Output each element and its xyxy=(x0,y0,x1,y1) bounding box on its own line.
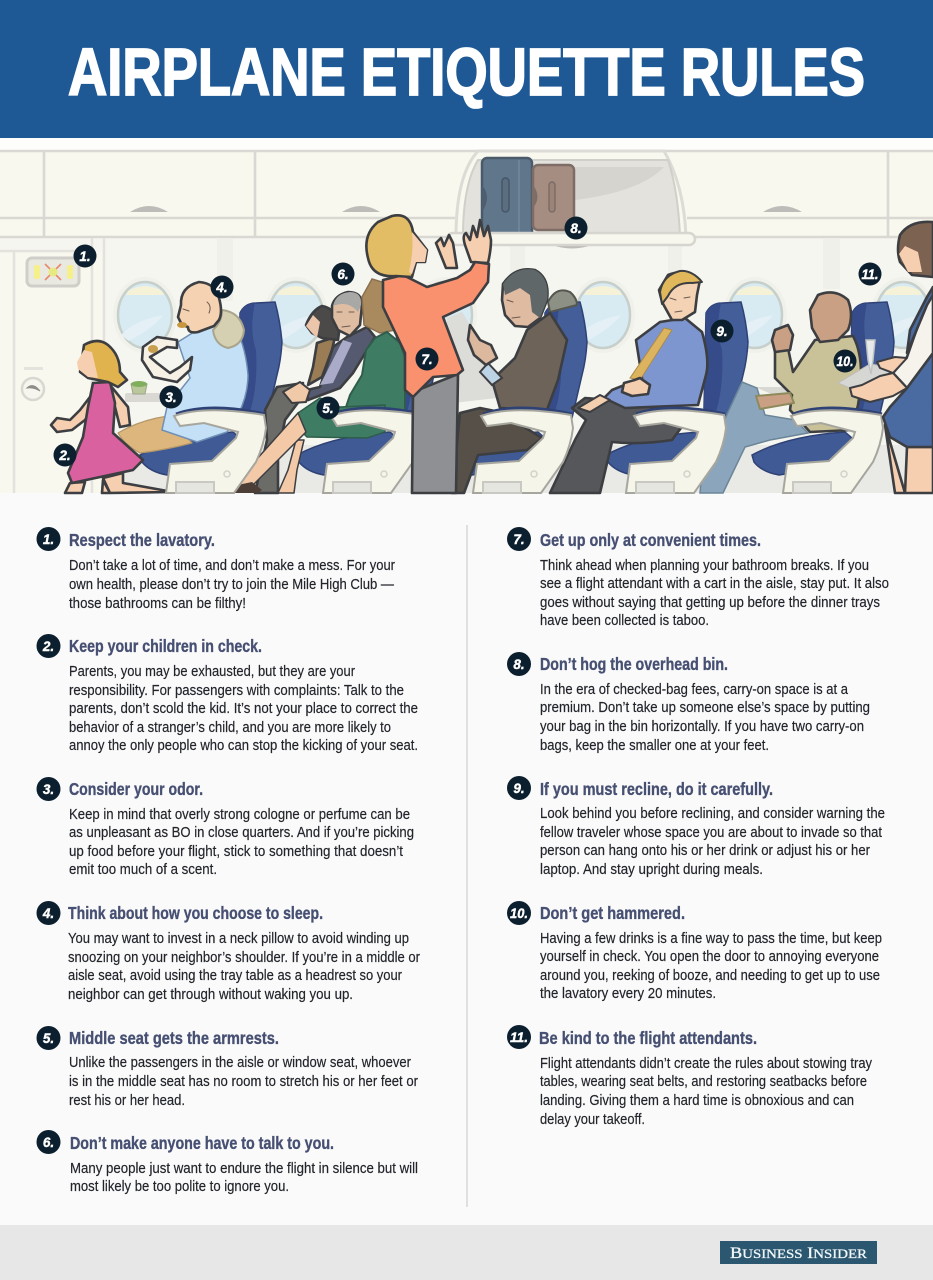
marker 4: 4. xyxy=(215,280,228,295)
body 1: those bathrooms can be filthy! xyxy=(69,596,246,612)
marker 6 xyxy=(332,262,354,286)
body 11: Flight attendants didn’t create the rules about stowing tray xyxy=(540,1056,873,1072)
figure: flight attendant with tray xyxy=(838,222,933,493)
rule 7 xyxy=(507,527,889,629)
body 9: fellow traveler whose space you are about to invade so that xyxy=(540,825,882,841)
body 5: rest his or her head. xyxy=(69,1093,185,1109)
windows xyxy=(113,277,933,353)
seat backs xyxy=(140,302,894,475)
rule 11 xyxy=(507,1025,873,1128)
rule 5: 5. xyxy=(43,1031,54,1046)
marker 7: 7. xyxy=(421,352,433,367)
ceiling light domes xyxy=(130,206,802,212)
body 5: is in the middle seat has no room to stretch his or her feet or xyxy=(69,1074,418,1090)
heading 3: Consider your odor. xyxy=(69,779,203,799)
body 2: annoy the only people who can stop the kicking of your seat. xyxy=(69,738,418,754)
marker 8 xyxy=(564,216,588,240)
body 2: responsibility. For passengers with complaints: Talk to the xyxy=(69,683,404,699)
body 2 xyxy=(69,664,418,754)
heading 6: Don’t make anyone have to talk to you. xyxy=(70,1133,334,1153)
icon: champagne glass xyxy=(866,340,875,374)
marker 4 xyxy=(210,276,234,298)
body 7: goes without saying that getting up before the dinner trays xyxy=(540,595,880,611)
body 6: most likely be too polite to ignore you. xyxy=(70,1179,289,1195)
title banner xyxy=(0,0,933,138)
rule 4: 4. xyxy=(42,906,54,921)
marker 11 xyxy=(858,262,882,286)
marker 10: 10. xyxy=(836,354,854,369)
marker 3 xyxy=(160,386,182,408)
body 4: snoozing on your neighbor’s shoulder. If you’re in a middle or xyxy=(68,950,420,966)
open overhead bin xyxy=(447,151,695,248)
marker 10 xyxy=(834,350,856,372)
figure: girl running in the aisle xyxy=(51,341,173,493)
figure: passenger with neck pillow eating xyxy=(118,282,248,453)
footer bar xyxy=(0,1225,933,1280)
marker 11: 11. xyxy=(862,267,878,282)
marker 8: 8. xyxy=(570,221,582,236)
suitcase: large xyxy=(482,158,532,237)
rule 5 xyxy=(36,1026,418,1109)
body 2: parents, don’t scold the kid. It’s not your place to correct the xyxy=(69,701,418,717)
heading 8: Don’t hog the overhead bin. xyxy=(540,654,728,674)
rule 1: 1. xyxy=(43,532,54,547)
body 9: laptop. And stay upright during meals. xyxy=(540,862,763,878)
figure: passenger in blue shirt reclining xyxy=(550,271,707,493)
body 1: Don’t take a lot of time, and don’t make a mess. For your xyxy=(69,558,395,574)
body 1 xyxy=(69,558,395,612)
body 10: yourself in check. You open the door to annoying everyone xyxy=(540,949,879,965)
rule 4 xyxy=(36,901,420,1003)
figures: family in the middle row xyxy=(228,279,405,493)
marker 1: 1. xyxy=(79,249,91,264)
body 8: In the era of checked-bag fees, carry-on space is at a xyxy=(540,682,849,698)
body 5: Unlike the passengers in the aisle or window seat, whoever xyxy=(69,1055,411,1071)
figure: suit passenger using phone xyxy=(452,269,577,493)
logo: Business Insider xyxy=(720,1241,877,1264)
marker 5 xyxy=(316,396,340,420)
heading 11: Be kind to the flight attendants. xyxy=(539,1028,757,1048)
rule 6: 6. xyxy=(43,1135,54,1150)
body 7 xyxy=(540,558,889,629)
marker 1 xyxy=(74,244,96,268)
body 8: bags, keep the smaller one at your feet. xyxy=(540,738,769,754)
body 6: Many people just want to endure the flight in silence but will xyxy=(70,1161,418,1177)
marker 9: 9. xyxy=(716,324,728,339)
marker 2 xyxy=(54,444,76,466)
body 7: Think ahead when planning your bathroom breaks. If you xyxy=(540,558,869,574)
body 10 xyxy=(540,931,882,1002)
body 3: emit too much of a scent. xyxy=(69,862,217,878)
body 2: Parents, you may be exhausted, but they are your xyxy=(69,664,355,680)
grey seat area behind standing woman xyxy=(447,312,497,404)
body 10: Having a few drinks is a fine way to pass the time, but keep xyxy=(540,931,882,947)
rule 7: 7. xyxy=(513,532,525,547)
heading 1: Respect the lavatory. xyxy=(69,530,215,550)
body 11: tables, wearing seat belts, and restoring seatbacks before xyxy=(540,1074,867,1090)
body 4: neighbor can get through without waking you up. xyxy=(68,987,353,1003)
body 5 xyxy=(69,1055,418,1109)
figure: passenger drinking, khaki shirt xyxy=(700,292,861,493)
rule 9: 9. xyxy=(513,781,525,796)
body 3: Keep in mind that overly strong cologne or perfume can be xyxy=(69,807,410,823)
body 9 xyxy=(540,806,885,878)
body 11 xyxy=(540,1056,873,1128)
rule 11: 11. xyxy=(510,1030,528,1045)
body 8: your bag in the bin horizontally. If you have two carry-on xyxy=(540,719,864,735)
body 9: Look behind you before reclining, and consider warning the xyxy=(540,806,885,822)
marker 7 xyxy=(416,348,438,370)
body 6 xyxy=(70,1161,418,1195)
rule 9 xyxy=(507,776,885,878)
rule 1 xyxy=(36,527,395,612)
body 4 xyxy=(68,931,420,1003)
heading 7: Get up only at convenient times. xyxy=(540,530,761,550)
body 8: premium. Don’t take up someone else’s space by putting xyxy=(540,700,870,716)
body 1: own health, please don’t try to join the Mile High Club — xyxy=(69,577,394,593)
suitcase: small xyxy=(533,165,574,230)
rule 2 xyxy=(36,634,418,754)
body 9: person can hang onto his or her drink or adjust his or her xyxy=(540,843,870,859)
body 10: around you, reeking of booze, and needing to get up to use xyxy=(540,968,880,984)
body 4: aisle seat, avoid using the tray table as a headrest so your xyxy=(68,968,402,984)
body 4: You may want to invest in a neck pillow to avoid winding up xyxy=(68,931,409,947)
rule 10: 10. xyxy=(510,906,528,921)
rule 2: 2. xyxy=(42,639,54,654)
body 3 xyxy=(69,807,414,878)
body 10: the lavatory every 20 minutes. xyxy=(540,986,716,1002)
rule 3 xyxy=(36,777,414,878)
heading 9: If you must recline, do it carefully. xyxy=(540,779,773,799)
logo: Business Insider: BUSINESS INSIDER xyxy=(730,1245,867,1262)
body 3: as unpleasant as BO in close quarters. And if you’re picking xyxy=(69,825,414,841)
heading 4: Think about how you choose to sleep. xyxy=(68,903,323,923)
icon: door handle xyxy=(22,367,44,400)
rule 8 xyxy=(507,652,870,754)
body 11: landing. Giving them a hard time is obnoxious and can xyxy=(540,1093,854,1109)
heading 2: Keep your children in check. xyxy=(69,636,262,656)
body 3: up food before your flight, stick to something that doesn’t xyxy=(69,844,403,860)
body 8 xyxy=(540,682,870,754)
marker 2: 2. xyxy=(58,448,71,463)
body 2: behavior of a stranger’s child, and you are more likely to xyxy=(69,720,391,736)
column divider xyxy=(466,525,468,1207)
heading 5: Middle seat gets the armrests. xyxy=(69,1028,279,1048)
marker 5: 5. xyxy=(322,401,334,416)
rule 3: 3. xyxy=(43,782,54,797)
rule 8: 8. xyxy=(513,657,525,672)
icon: lavatory sign xyxy=(27,258,79,286)
figure: woman standing reaching for overhead bin xyxy=(366,215,491,493)
body 11: delay your takeoff. xyxy=(540,1112,645,1128)
heading 10: Don’t get hammered. xyxy=(540,903,685,923)
illustration: airplane cabin scene xyxy=(0,138,933,493)
marker 9 xyxy=(710,320,734,342)
rule 6 xyxy=(36,1130,418,1195)
marker 6: 6. xyxy=(337,267,349,282)
body 7: have been collected is taboo. xyxy=(540,613,709,629)
seat armrests xyxy=(166,408,883,493)
marker 3: 3. xyxy=(165,390,177,405)
rule 10 xyxy=(507,901,882,1002)
body 7: see a flight attendant with a cart in the aisle, stay put. It also xyxy=(540,576,889,592)
